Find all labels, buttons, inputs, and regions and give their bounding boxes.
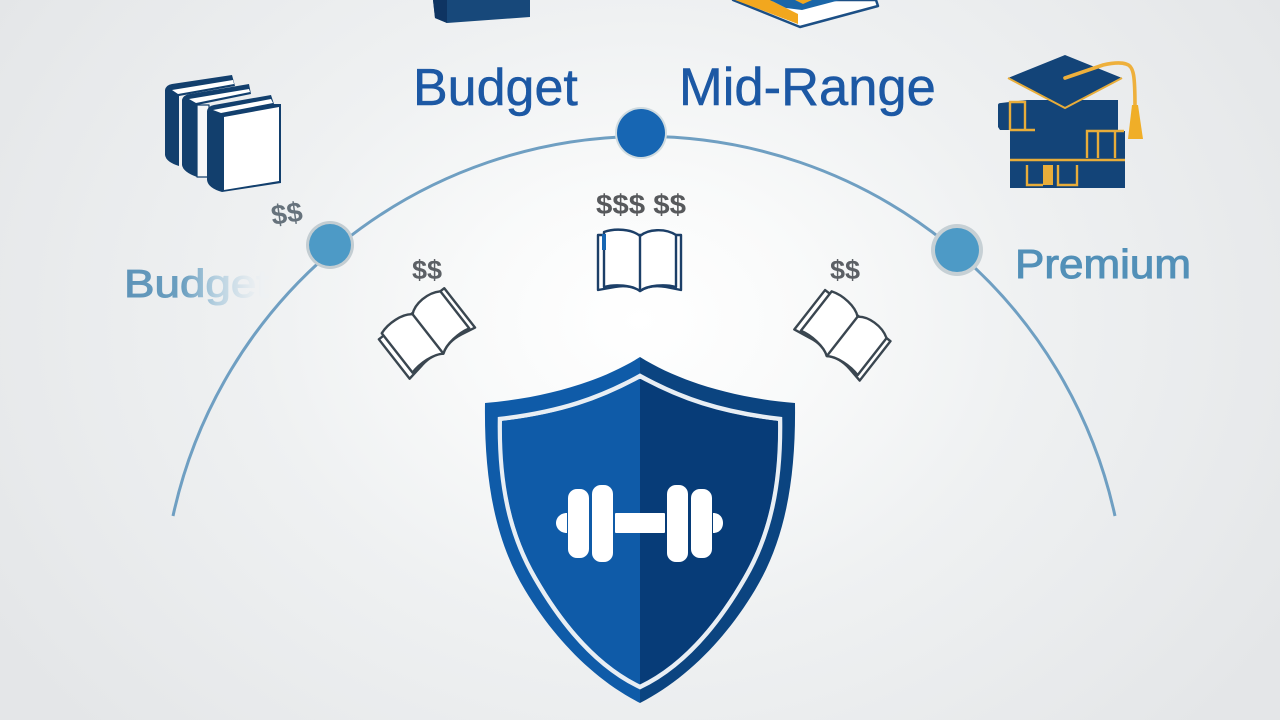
icon: open book, center bbox=[598, 230, 681, 291]
label: dollar signs, left book: $$ bbox=[412, 255, 442, 285]
label: dollar signs, center book: $$$ $$ bbox=[596, 189, 686, 220]
faded label: Budget: Budget bbox=[124, 263, 269, 306]
icon: stack of three books bbox=[165, 75, 281, 192]
heading: Mid-Range: Mid-Range bbox=[679, 58, 936, 117]
icon: open book, left tilted bbox=[376, 284, 476, 379]
label: dollar signs, budget node: $$ bbox=[269, 196, 305, 231]
label: dollar signs, right book: $$ bbox=[830, 255, 860, 285]
icon: cropped gold book at top bbox=[733, 0, 878, 27]
node: mid-range bbox=[615, 107, 667, 159]
icon: graduation cap on books bbox=[998, 55, 1143, 188]
node: premium bbox=[931, 224, 983, 276]
label: Premium: Premium bbox=[1015, 241, 1191, 287]
node: budget bbox=[306, 221, 354, 269]
arc timeline bbox=[173, 136, 1115, 516]
icon: open book, right tilted bbox=[794, 286, 894, 381]
dumbbell bbox=[556, 485, 723, 562]
icon: cropped dark book at top bbox=[433, 0, 530, 23]
icon: shield with dumbbell bbox=[485, 357, 795, 703]
heading: Budget: Budget bbox=[413, 59, 578, 117]
